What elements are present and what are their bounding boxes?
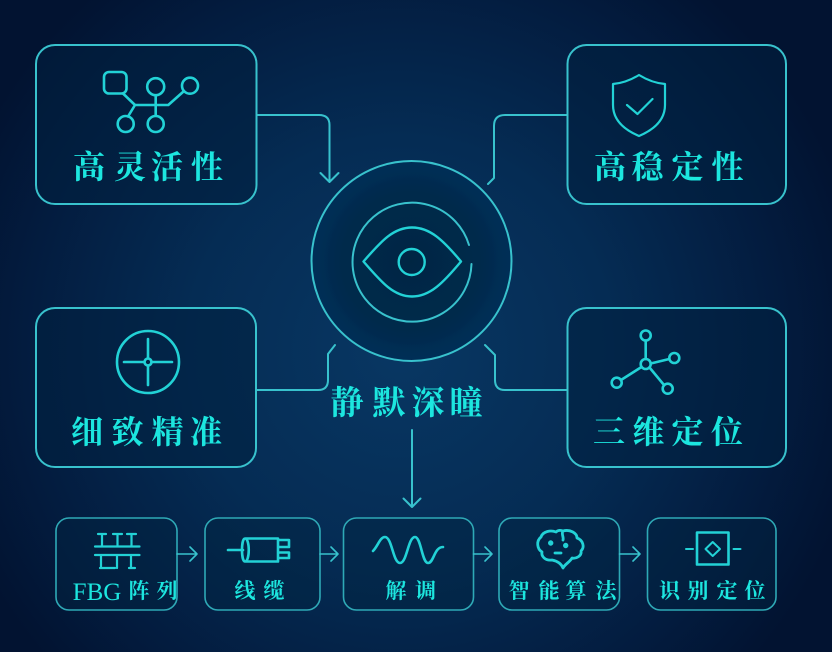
arrow: array to cable — [177, 547, 197, 561]
core: silent deep pupil emblem — [312, 161, 512, 361]
icon: cable connector — [228, 538, 289, 562]
label: 解调: 解调 — [386, 579, 436, 603]
icon: node network — [104, 72, 198, 132]
icon: brain — [538, 530, 583, 568]
label: 识别定位: 识别定位 — [659, 579, 766, 603]
label: 高稳定性: 高稳定性 — [594, 149, 744, 185]
icon: wave — [373, 537, 443, 563]
icon: broken inner ring — [353, 203, 472, 322]
panel: high stability — [568, 45, 786, 204]
icon: FBG array — [95, 534, 140, 568]
arrow: cable to demodulation — [320, 547, 338, 561]
icon: eye outline — [364, 228, 461, 296]
arrow: algorithm to positioning — [620, 547, 640, 561]
label: 三维定位: 三维定位 — [593, 414, 743, 450]
connector: bottom-left panel to core — [256, 345, 335, 390]
process step: identify and locate — [648, 518, 776, 610]
arrow: title to demodulation — [404, 430, 420, 507]
label: 智能算法: 智能算法 — [508, 579, 618, 603]
process step: FBG array — [56, 518, 178, 610]
process step: cable — [205, 518, 320, 610]
panel: fine precision — [36, 308, 256, 467]
icon: crosshair — [117, 331, 179, 393]
process step: demodulation — [344, 518, 474, 610]
title: 静默深瞳: 静默深瞳 — [330, 385, 482, 422]
panel: 3D positioning — [568, 308, 786, 467]
connector: top-left panel to core — [257, 115, 338, 182]
icon: pupil — [399, 249, 425, 275]
arrow: demodulation to algorithm — [474, 547, 492, 561]
icon: shield with check — [613, 75, 665, 136]
connector: top-right panel to core — [488, 115, 567, 184]
label: FBG阵列: FBG — [73, 579, 121, 606]
icon: 3D nodes — [612, 330, 679, 394]
label: 高灵活性: 高灵活性 — [73, 149, 223, 185]
label: 线缆: 线缆 — [234, 579, 284, 603]
process step: smart algorithm — [499, 518, 620, 610]
panel: high flexibility — [36, 45, 256, 204]
icon: framed diamond — [686, 532, 740, 564]
process step: FBG array: 阵列 — [128, 579, 178, 603]
connector: bottom-right panel to core — [485, 345, 567, 390]
label: 细致精准: 细致精准 — [71, 414, 222, 450]
